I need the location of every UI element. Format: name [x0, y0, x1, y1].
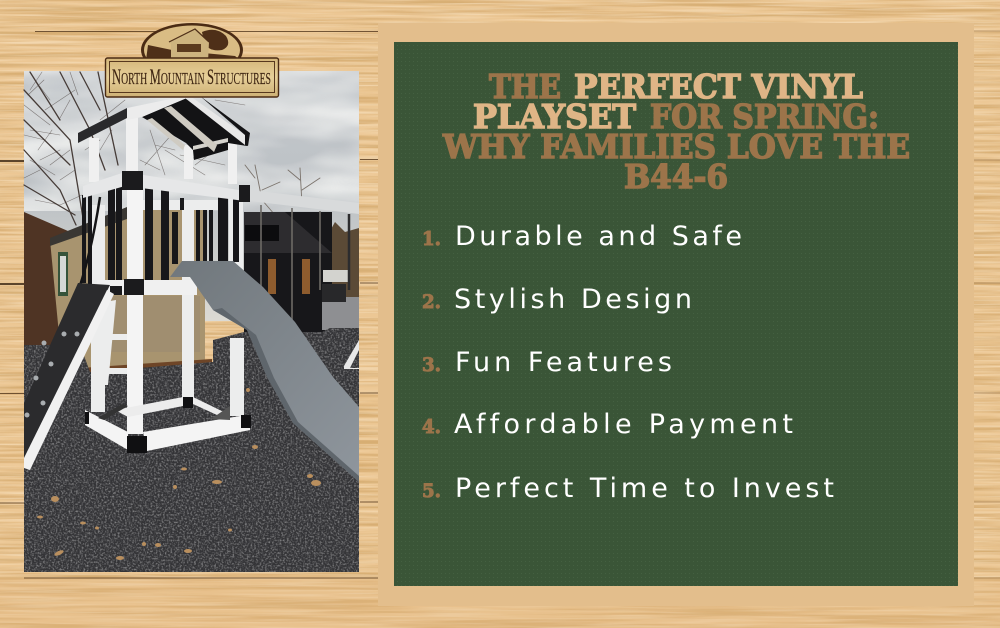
- post brackets: [110, 171, 250, 295]
- brown shed left: [24, 212, 68, 346]
- list of reasons: [422, 221, 834, 504]
- swing beam and chains: [250, 190, 359, 320]
- item 1: Durable and Safe: [455, 221, 742, 252]
- front fascia right: [185, 96, 245, 145]
- tower upper posts: [89, 116, 237, 184]
- fallen leaves: [37, 388, 321, 560]
- panel: tan frame: [378, 23, 974, 606]
- front fascia left: [127, 96, 187, 120]
- title: PLAYSET: [473, 97, 636, 136]
- tower back posts and rails: [91, 198, 244, 416]
- item 4: Affordable Payment: [454, 409, 793, 440]
- panel: playset photo: [24, 71, 359, 572]
- base frame: [85, 397, 251, 453]
- item 3: Fun Features: [455, 347, 672, 378]
- item 5: Perfect Time to Invest: [455, 473, 834, 504]
- tower top rail: [83, 172, 245, 201]
- climbing wall: [24, 283, 114, 470]
- item 2: 2.: [422, 291, 441, 313]
- item 5: 5.: [422, 480, 441, 502]
- title: WHY FAMILIES LOVE THE: [442, 127, 910, 166]
- title: THE: [489, 67, 561, 106]
- logo name: NORTH MOUNTAIN STRUCTURES: [112, 64, 271, 89]
- item 4: 4.: [422, 416, 441, 438]
- back rafter: [193, 138, 228, 150]
- deck band: [97, 280, 197, 295]
- title: B44-6: [624, 157, 728, 196]
- safety rope: [66, 197, 100, 322]
- left eave: [78, 108, 127, 143]
- bare trees: [24, 72, 320, 230]
- slide: [170, 261, 359, 482]
- gravel ground: [24, 328, 359, 572]
- panel: green content: [394, 42, 958, 586]
- far white legs: [344, 340, 359, 369]
- roof outer black edge: [200, 96, 250, 146]
- black shed: [244, 212, 332, 332]
- logo inner border: [110, 62, 274, 92]
- black pickets: [82, 183, 239, 285]
- photo sky: [24, 71, 359, 321]
- inner rafters: [164, 106, 217, 152]
- main front post: [127, 186, 143, 434]
- roof black underside: [142, 98, 247, 160]
- logo: North Mountain Structures: [106, 23, 278, 97]
- playset roof: [78, 96, 250, 160]
- item 2: Stylish Design: [454, 284, 692, 315]
- logo plaque: [106, 58, 278, 97]
- pavement and truck: [322, 270, 359, 330]
- item 3: 3.: [422, 354, 441, 376]
- title: [442, 67, 910, 196]
- logo oval badge: [141, 23, 243, 77]
- far trees: [325, 222, 359, 300]
- title: PERFECT VINYL: [574, 67, 863, 106]
- photo clouds: [24, 71, 359, 211]
- item 1: 1.: [422, 228, 441, 250]
- lower rafter: [147, 118, 185, 150]
- tan shed: [50, 207, 212, 378]
- title: FOR SPRING:: [650, 97, 879, 136]
